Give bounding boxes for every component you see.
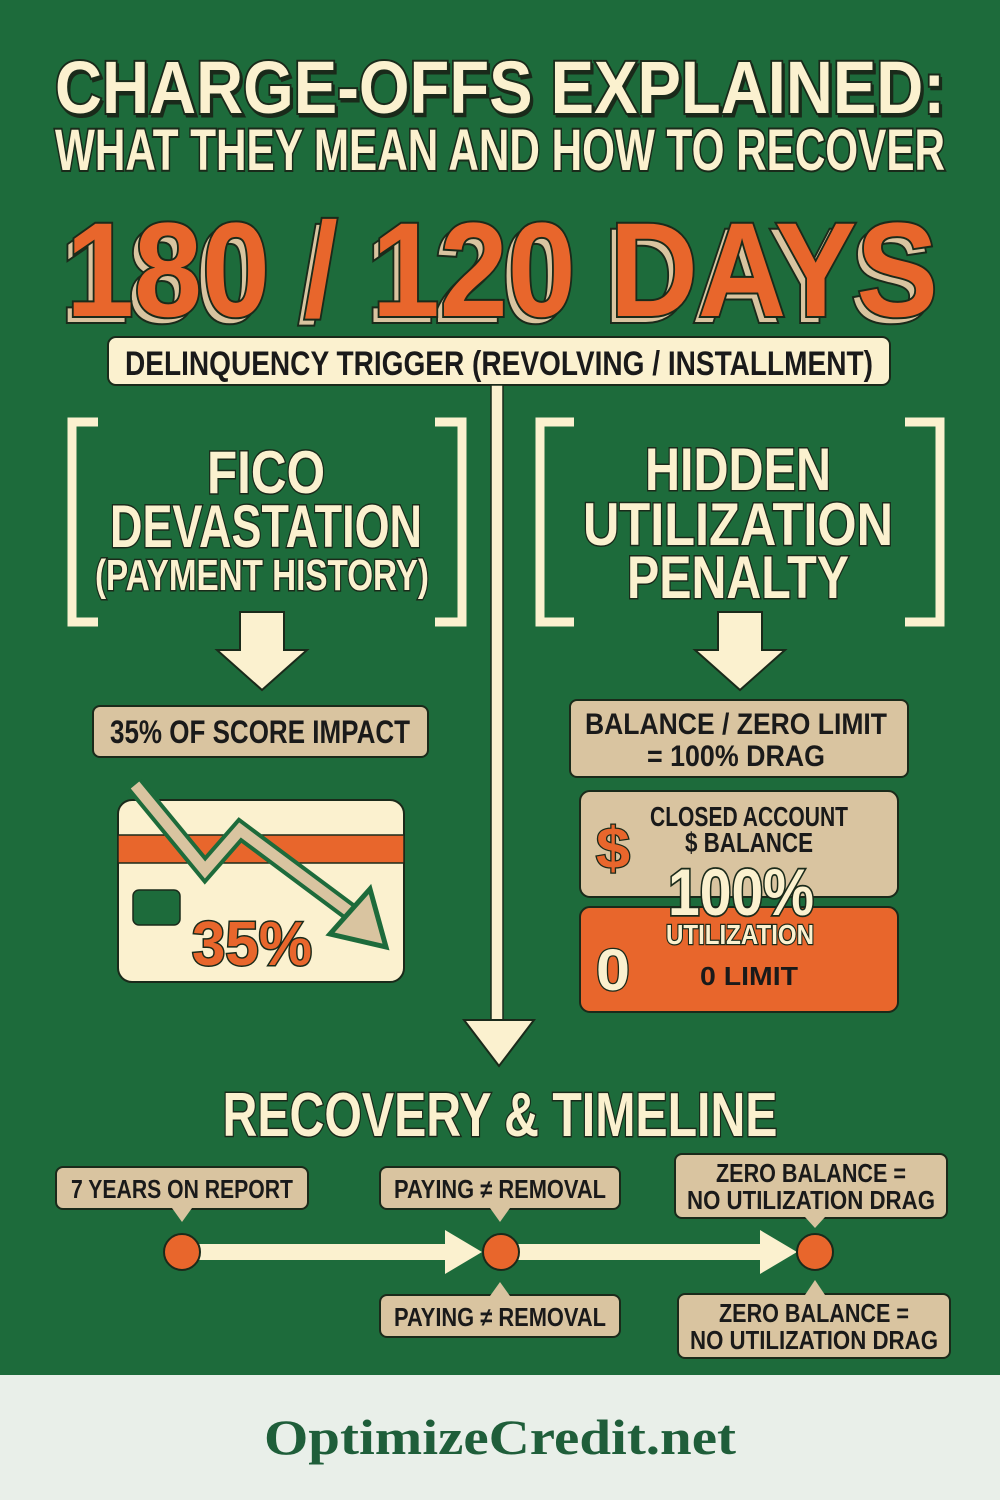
box: closed account balance: CLOSED ACCOUNT — [650, 801, 848, 832]
callout: paying not removal top — [380, 1167, 620, 1222]
callout: zero balance bottom — [678, 1280, 950, 1358]
callout: 100% utilization: UTILIZATION — [666, 919, 814, 950]
callout: 100% utilization — [666, 855, 814, 950]
callout: zero balance top: ZERO BALANCE = — [716, 1158, 906, 1188]
callout: zero balance bottom: NO UTILIZATION DRAG — [690, 1325, 938, 1355]
callout: zero balance top: NO UTILIZATION DRAG — [687, 1185, 935, 1215]
icon: credit card with falling arrow: 35% — [192, 910, 312, 979]
arrow: right down — [695, 612, 785, 690]
panel: FICO devastation — [72, 422, 462, 622]
callout: 100% utilization: 100% — [668, 855, 814, 929]
panel: hidden utilization penalty — [540, 422, 940, 622]
timeline — [164, 1230, 833, 1274]
panel: FICO devastation: (PAYMENT HISTORY) — [95, 551, 429, 600]
headline stat: 180 / 120 DAYS — [60, 202, 932, 351]
box: closed account balance — [580, 791, 898, 897]
panel: hidden utilization penalty: UTILIZATION — [583, 491, 893, 558]
arrow: left down — [217, 612, 307, 690]
callout: zero balance top — [675, 1154, 947, 1228]
panel: hidden utilization penalty: HIDDEN — [645, 436, 831, 503]
label: balance / zero limit: = 100% DRAG — [647, 740, 825, 773]
callout: zero balance bottom: ZERO BALANCE = — [719, 1298, 909, 1328]
title — [55, 46, 947, 183]
callout: 7 years on report — [56, 1167, 308, 1222]
box: closed account balance: $ — [596, 816, 630, 881]
icon: credit card with falling arrow — [118, 785, 404, 982]
footer — [0, 1375, 1000, 1500]
panel: hidden utilization penalty: PENALTY — [627, 544, 849, 611]
heading: recovery & timeline: RECOVERY & TIMELINE — [222, 1081, 778, 1150]
arrow: central vertical — [464, 385, 534, 1066]
panel: FICO devastation: FICO — [207, 439, 325, 506]
callout: paying not removal top: PAYING ≠ REMOVAL — [394, 1174, 606, 1204]
label: 35% of score impact — [93, 706, 428, 757]
headline stat: 180 / 120 DAYS — [66, 196, 938, 345]
callout: paying not removal bottom — [380, 1282, 620, 1337]
label: 35% of score impact: 35% OF SCORE IMPACT — [110, 714, 410, 750]
box: closed account balance: $ BALANCE — [685, 827, 813, 858]
box: zero limit: 0 — [596, 938, 630, 1003]
label: balance / zero limit — [570, 700, 908, 777]
callout: paying not removal bottom: PAYING ≠ REMOVAL — [394, 1302, 606, 1332]
panel: FICO devastation: DEVASTATION — [110, 493, 422, 560]
label: balance / zero limit: BALANCE / ZERO LIMIT — [585, 708, 887, 741]
pill: delinquency trigger — [108, 337, 890, 385]
callout: 7 years on report: 7 YEARS ON REPORT — [71, 1174, 293, 1204]
box: zero limit — [580, 907, 898, 1012]
box: zero limit: 0 LIMIT — [700, 961, 798, 991]
footer: OptimizeCredit.net — [264, 1409, 736, 1465]
